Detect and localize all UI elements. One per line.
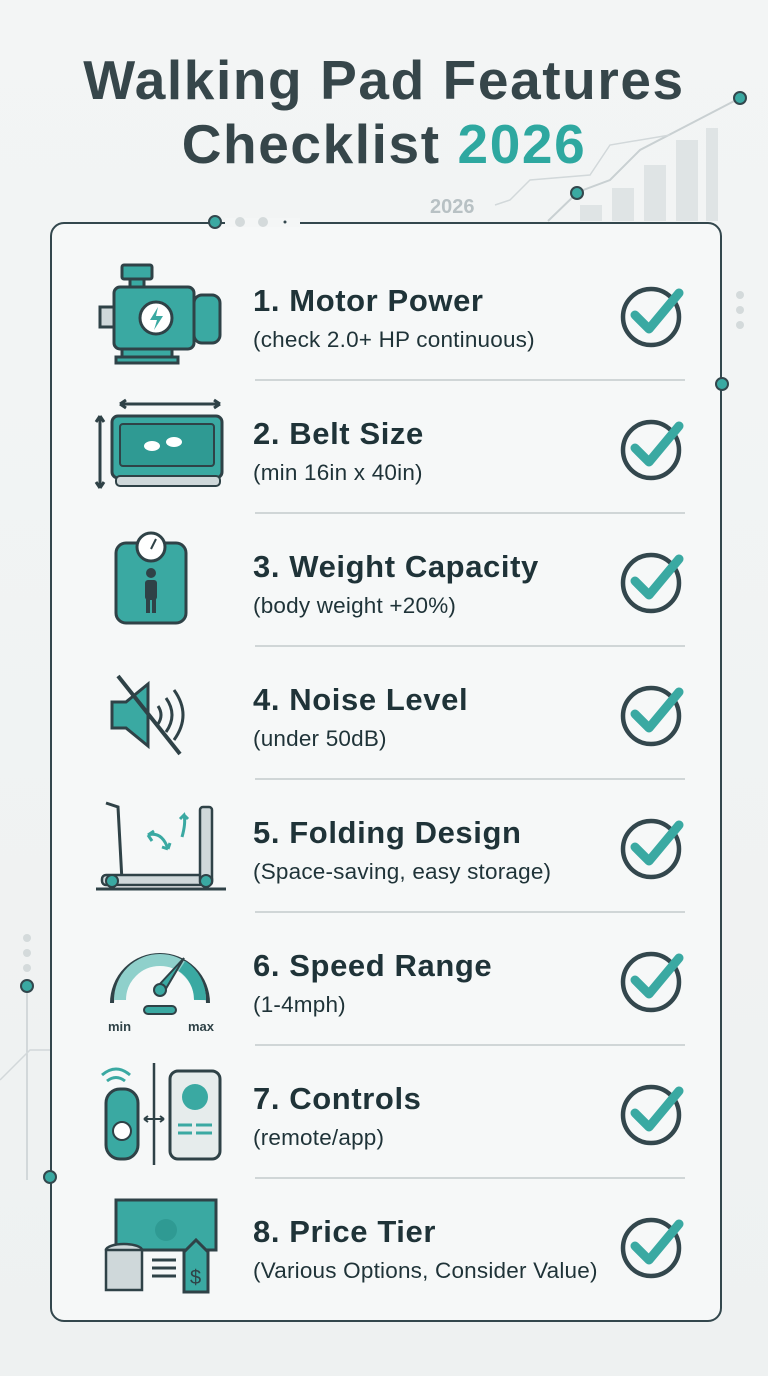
background decor chart: 2026 <box>430 196 474 218</box>
title <box>83 49 685 175</box>
item 8 price tier <box>104 1198 684 1294</box>
item 6 speed range: (1-4mph) <box>253 992 346 1017</box>
item 7 controls <box>101 1063 685 1179</box>
item 2 belt size <box>94 398 685 514</box>
item 6 speed range <box>108 948 685 1046</box>
item 1 motor power: (check 2.0+ HP continuous) <box>253 327 535 352</box>
title: Checklist 2026 <box>182 113 586 175</box>
item 7 controls: (remote/app) <box>253 1125 384 1150</box>
icon: belt <box>94 398 224 489</box>
icon: money: $ <box>190 1267 201 1289</box>
icon: motor <box>98 264 222 364</box>
icon: money <box>104 1198 218 1294</box>
item 4 noise level <box>110 674 685 780</box>
item 7 controls: 7. Controls <box>253 1081 422 1116</box>
item 2 belt size: 2. Belt Size <box>253 416 424 451</box>
item 5 folding design: (Space-saving, easy storage) <box>253 859 551 884</box>
title: Walking Pad Features <box>83 49 685 111</box>
icon: check <box>620 286 684 348</box>
icon: mute speaker <box>110 674 184 756</box>
icon: remote and phone <box>101 1063 222 1165</box>
text: 1. Motor Power <box>253 283 484 318</box>
item 5 folding design <box>96 802 685 913</box>
item 3 weight capacity: 3. Weight Capacity <box>253 549 539 584</box>
item 3 weight capacity: (body weight +20%) <box>253 593 456 618</box>
icon: folding treadmill <box>96 802 226 890</box>
item 1 motor power <box>98 264 685 381</box>
item 4 noise level: (under 50dB) <box>253 726 387 751</box>
item 6 speed range: 6. Speed Range <box>253 948 492 983</box>
item 5 folding design: 5. Folding Design <box>253 815 522 850</box>
item 8 price tier: (Various Options, Consider Value) <box>253 1258 598 1283</box>
item 2 belt size: (min 16in x 40in) <box>253 460 423 485</box>
icon: speedometer <box>108 953 215 1033</box>
item 4 noise level: 4. Noise Level <box>253 682 468 717</box>
item 3 weight capacity <box>114 532 685 647</box>
item 8 price tier: 8. Price Tier <box>253 1214 436 1249</box>
icon: scale <box>114 532 188 624</box>
panel: checklist <box>50 222 722 1322</box>
